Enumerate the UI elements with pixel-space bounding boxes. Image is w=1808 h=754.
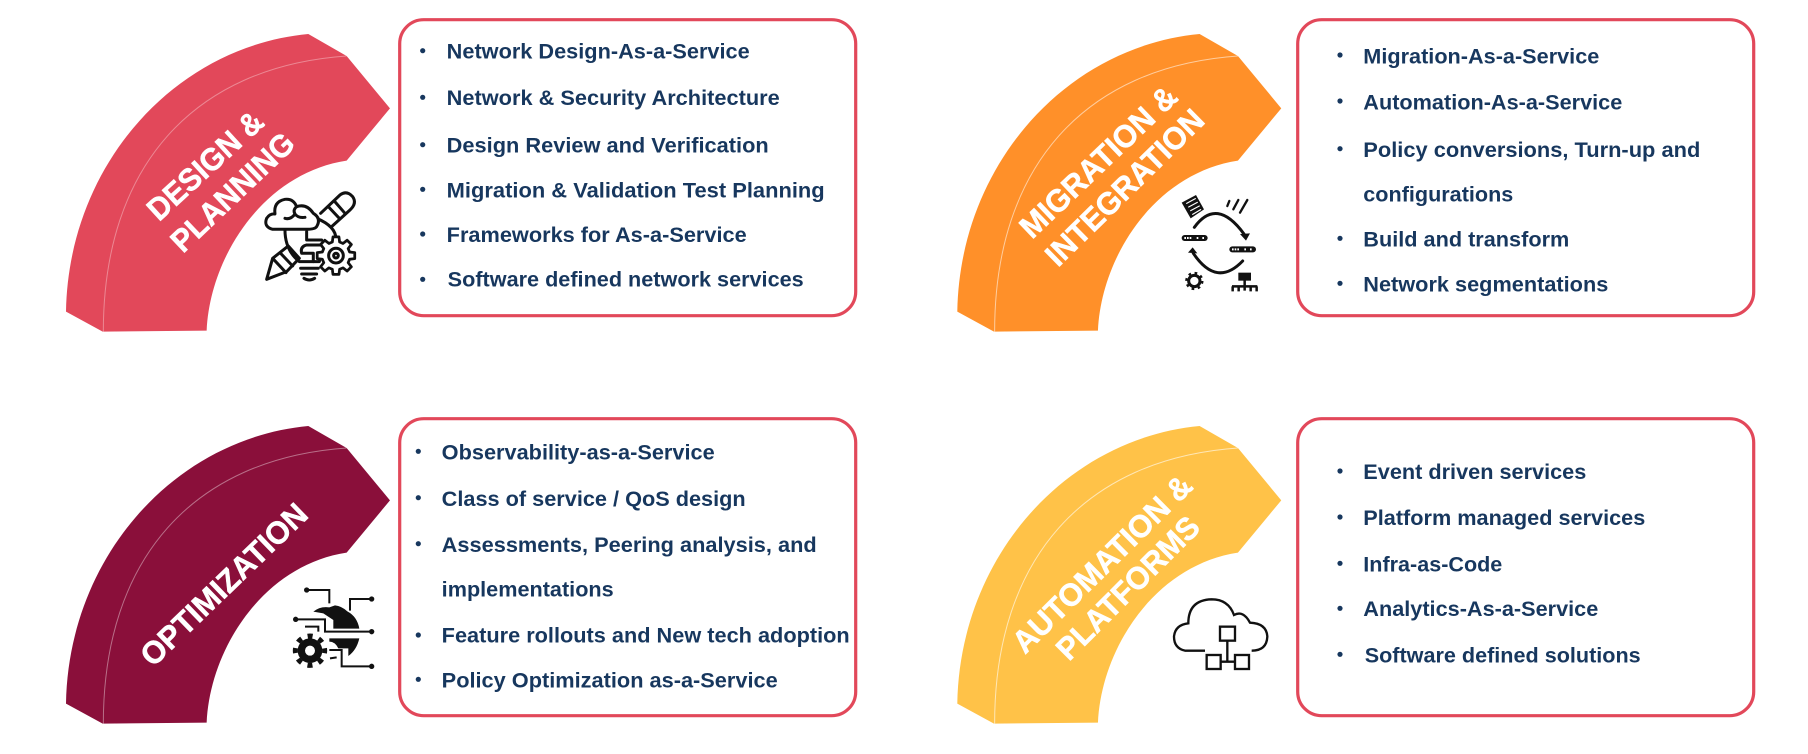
list item: Analytics-As-a-Service — [1363, 597, 1598, 621]
list item: Network Design-As-a-Service — [447, 40, 750, 64]
list item: Policy Optimization as-a-Service — [442, 669, 778, 693]
list item: Event driven services — [1363, 460, 1586, 484]
heading: migration and integration: INTEGRATION — [1038, 102, 1211, 273]
list item: Migration & Validation Test Planning — [447, 179, 825, 203]
list item: Infra-as-Code — [1363, 552, 1502, 576]
list item: Software defined solutions — [1365, 643, 1641, 667]
list item: Feature rollouts and New tech adoption — [442, 624, 850, 648]
list item: Platform managed services — [1363, 506, 1645, 530]
arc band: migration and integration — [957, 34, 1281, 332]
list item: Frameworks for As-a-Service — [447, 223, 747, 247]
list item: Migration-As-a-Service — [1363, 44, 1599, 68]
heading: migration and integration: MIGRATION & — [1012, 78, 1184, 245]
heading: automation and platforms: PLATFORMS — [1048, 509, 1207, 667]
panel border — [1298, 419, 1754, 716]
list item: Observability-as-a-Service — [442, 440, 715, 464]
panel: design and planning services — [400, 20, 856, 316]
heading: automation and platforms: AUTOMATION & — [1005, 467, 1199, 660]
list item — [1337, 138, 1700, 207]
card: design and planning — [66, 20, 856, 332]
list item: Software defined network services — [448, 268, 804, 292]
panel border — [400, 419, 856, 716]
arc band: design and planning — [66, 34, 390, 332]
list item: configurations — [1363, 183, 1513, 207]
icon: cloud network — [1174, 599, 1267, 669]
panel: migration and integration services — [1298, 20, 1754, 316]
card: migration and integration — [957, 20, 1754, 332]
panel border — [1298, 20, 1754, 316]
list item: Build and transform — [1363, 228, 1569, 252]
panel: optimization services — [400, 419, 856, 716]
icon: circuit brain with gear — [293, 587, 374, 669]
heading: design and planning: PLANNING — [163, 125, 302, 259]
card: automation and platforms — [957, 419, 1754, 724]
list item: Policy conversions, Turn-up and — [1363, 138, 1700, 162]
icon: brain bulb with pencil and gear — [266, 193, 355, 280]
list item: Design Review and Verification — [447, 134, 769, 158]
arc band: automation and platforms — [957, 426, 1281, 724]
list item: Network & Security Architecture — [447, 86, 780, 110]
arc band: optimization — [66, 426, 390, 724]
card: optimization — [66, 419, 856, 724]
heading: optimization: OPTIMIZATION — [133, 496, 315, 673]
heading: design and planning: DESIGN & — [139, 103, 271, 227]
panel border — [400, 20, 856, 316]
icon: migration cycle — [1182, 195, 1257, 291]
list item: Network segmentations — [1363, 273, 1608, 297]
panel: automation and platforms services — [1298, 419, 1754, 716]
list item: Class of service / QoS design — [442, 487, 746, 511]
list item: Automation-As-a-Service — [1363, 90, 1622, 114]
list item: Assessments, Peering analysis, and — [442, 533, 817, 557]
list item: implementations — [442, 578, 614, 602]
list item — [416, 533, 817, 602]
